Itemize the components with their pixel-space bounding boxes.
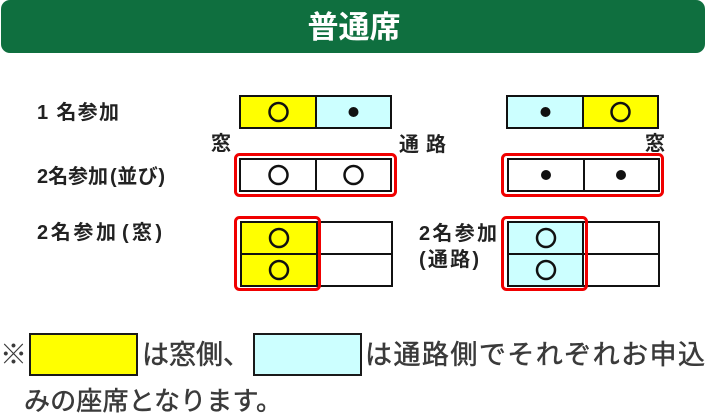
label: aisle: 通路 [399, 133, 446, 156]
label: 2名参加(並び): 2名参加 [37, 165, 108, 188]
label: 2名参加(通路): 2名参加 [419, 222, 497, 245]
label: 2名参加(並び) [37, 165, 165, 188]
note: line 1: は通路側でそれぞれお申込 [365, 340, 705, 370]
header banner [1, 0, 705, 53]
note: line 1: ※ [0, 340, 27, 370]
note: line 1 [0, 334, 705, 375]
label: 1名参加: 1 名参加 [37, 101, 119, 124]
note: line 1: は窓側、 [142, 340, 250, 370]
seat row: 1名参加 window left [240, 96, 391, 128]
seat row: side by side right [502, 154, 662, 196]
seat row: 1名参加 window right [507, 96, 658, 128]
label: 2名参加(通路): (通路) [419, 248, 479, 271]
label: 2名参加(通路) [419, 222, 497, 271]
label: 2名参加(並び): (並び) [110, 165, 165, 188]
header banner: 普通席 [308, 10, 400, 45]
seat block: window pair [236, 218, 392, 290]
label: window left: 窓 [211, 132, 231, 155]
label: 2名参加(窓): (窓) [122, 221, 162, 244]
label: window right: 窓 [645, 132, 665, 155]
seat row: side by side left [236, 154, 396, 196]
label: 2名参加(窓) [37, 221, 162, 244]
label: 2名参加(窓): 2名参加 [37, 221, 116, 244]
seat block: aisle pair [502, 218, 659, 290]
